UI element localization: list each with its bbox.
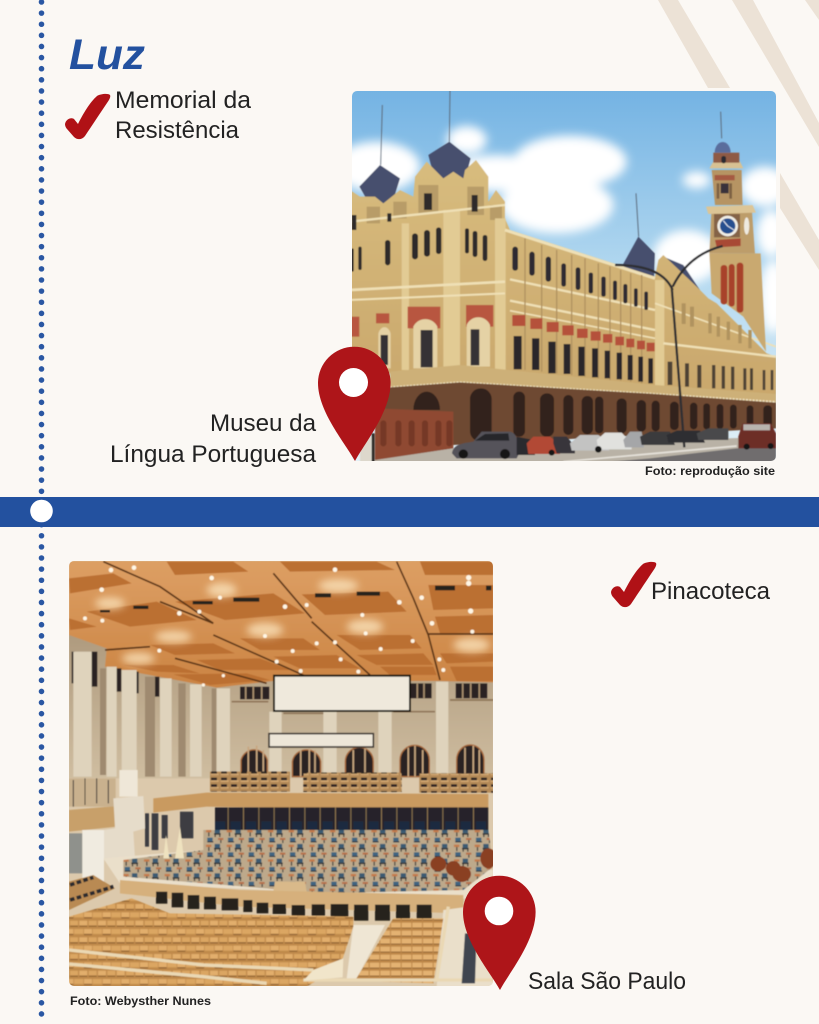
parked cars (452, 423, 776, 459)
wing lower windows (514, 336, 653, 383)
canopy (390, 365, 776, 403)
large projection screen (274, 676, 410, 711)
ceiling (69, 561, 493, 688)
main seating block (69, 898, 353, 987)
label: Memorial da Resistência: Resistência (115, 117, 240, 144)
right wing upper windows (682, 303, 752, 348)
slate roofs (359, 142, 700, 293)
left top seat backs (70, 877, 113, 900)
foreground post (360, 437, 372, 463)
right wing windows (668, 362, 773, 390)
icon: red check mark (65, 94, 110, 139)
photo: Sala São Paulo (69, 561, 496, 987)
gable shading (367, 185, 502, 223)
photo credit: Webysther Nunes: Foto: Webysther Nunes (70, 996, 211, 1008)
grand column lower and base (103, 770, 145, 858)
ground and road (374, 438, 739, 461)
front rails (69, 907, 493, 983)
left balcony (69, 806, 117, 832)
left block red panels (350, 305, 493, 337)
stage floor behind chairs (103, 850, 493, 900)
antennas (381, 90, 722, 237)
left block windows (351, 193, 487, 272)
ceiling spot lamps (100, 586, 491, 612)
brick wall niches (383, 423, 449, 443)
conductor podium (273, 882, 307, 892)
stage chairs (123, 830, 493, 893)
wing red panels (512, 315, 655, 351)
column shadows (100, 668, 216, 777)
label: Museu da Língua Portuguesa: Língua Portuguesa (110, 441, 317, 468)
label: Pinacoteca: Pinacoteca (651, 578, 771, 605)
wall cornice (232, 700, 493, 713)
hall wall (69, 632, 493, 778)
arcade (384, 382, 776, 446)
harps (163, 827, 184, 858)
label: Memorial da Resistência: Memorial da (115, 87, 252, 114)
columns (73, 652, 448, 777)
upper seating rows (210, 772, 493, 793)
map pin: Museu da Língua Portuguesa (318, 347, 391, 461)
cornices (350, 205, 776, 357)
icon: red check mark (611, 562, 656, 607)
balcony corner (303, 958, 343, 981)
white lower wall (82, 830, 104, 883)
central aisle (347, 925, 385, 978)
photo credit: reprodução site: Foto: reprodução site (645, 466, 775, 478)
arches (413, 388, 772, 442)
arch bars (248, 746, 479, 777)
wing pilasters (525, 238, 642, 383)
ceiling coffers (69, 562, 493, 685)
map pin: Sala São Paulo (463, 876, 536, 990)
dark ceiling lines (103, 562, 493, 683)
photo: Estação da Luz (333, 90, 790, 470)
dotted vertical timeline (39, 2, 44, 1024)
left top seats (69, 875, 115, 910)
upper wall openings (72, 652, 487, 699)
clouds (333, 126, 790, 333)
far right seating (462, 933, 477, 983)
blue horizontal band with timeline stop (0, 497, 819, 527)
left balcony rail (69, 778, 116, 807)
right seating block (355, 918, 443, 983)
wing upper windows (512, 247, 648, 310)
brick wall (375, 408, 453, 461)
small panel (269, 734, 373, 747)
title: Luz: Luz (69, 31, 145, 79)
glowing beams (95, 579, 490, 664)
label: Museu da Língua Portuguesa: Museu da (210, 410, 317, 437)
lower arched windows (378, 317, 490, 368)
decorative diagonal stripes (658, 0, 819, 270)
arched windows (241, 745, 484, 777)
clock tower (706, 142, 766, 352)
window mullions (246, 683, 479, 699)
corner pilasters (402, 210, 664, 387)
stage wall panels (156, 892, 432, 921)
dark doorways (69, 812, 193, 873)
label: Sala São Paulo: Sala São Paulo (528, 968, 686, 995)
balcony front (153, 793, 488, 813)
ceiling lights (83, 565, 474, 687)
station facade (350, 160, 776, 398)
orchestra back wall (215, 807, 488, 830)
right aisle (437, 903, 493, 987)
double basses (430, 848, 496, 882)
street lamp (615, 246, 723, 447)
stage front (120, 880, 463, 913)
